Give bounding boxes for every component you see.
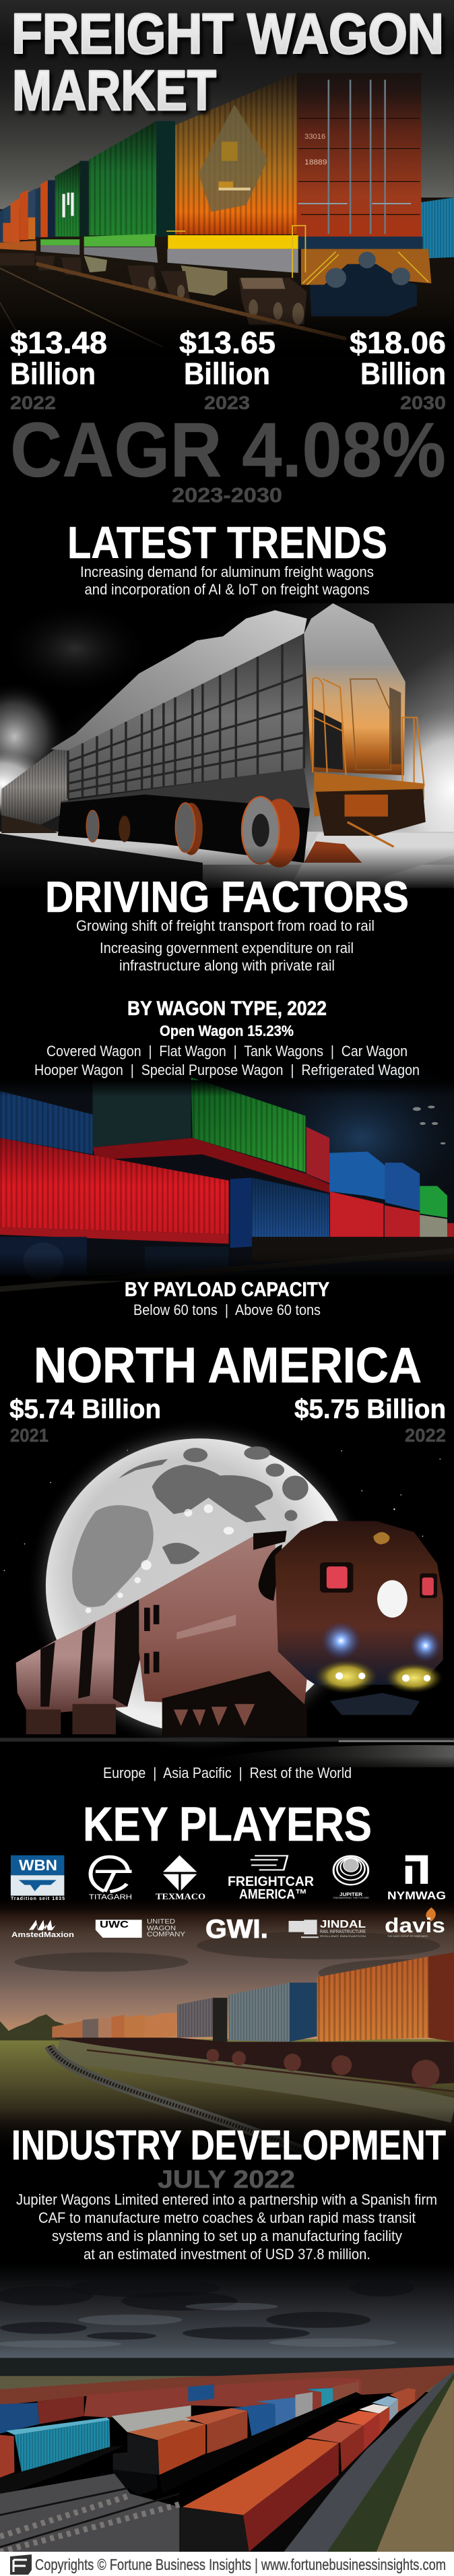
logo: Jupiter: ENGINEERING THE FUTURE (333, 1897, 370, 1899)
icon: storm clouds (0, 2278, 414, 2339)
icon: bogies (0, 1237, 454, 1292)
icon: green containers (55, 121, 175, 237)
text: trends description: Increasing demand for aluminum freight wagons (80, 563, 374, 580)
stat: north america 2021 (9, 1394, 161, 1446)
logo: FreightCar America (228, 1856, 315, 1902)
stat: north america 2022: $5.75 Billion (294, 1394, 446, 1424)
logo: Texmaco: TEXMACO (156, 1891, 205, 1901)
icon: red container end: 33016 (304, 133, 325, 141)
illustration: locomotive and moon (0, 1418, 454, 1773)
logo: Jindal Rail: RAIL INFRASTRUCTURE (320, 1930, 366, 1934)
logo: FreightCar America: FREIGHTCAR (228, 1874, 315, 1889)
logo: FreightCar America: AMERICA™ (239, 1887, 307, 1902)
text: other regions: Europe | Asia Pacific | Rest of the World (103, 1765, 352, 1781)
icon: blue container (230, 1177, 329, 1248)
panel: industry development (0, 2122, 454, 2552)
stat: 2023: 2023 (204, 392, 250, 413)
text: development description: systems and is planning to set up a manufacturing facility (52, 2228, 402, 2244)
logo: Nymwag: NYMWAG (387, 1889, 446, 1902)
panel: latest trends (0, 518, 454, 891)
icon: foreground train (180, 2366, 454, 2552)
icon: bogies and wheels (0, 253, 307, 325)
text: driver two: Increasing government expenditure on rail (100, 940, 354, 956)
icon: tank cars (16, 1599, 142, 1715)
logo: United Wagon Company: UWC (100, 1919, 129, 1930)
icon: ground and tracks (0, 2366, 454, 2552)
logo: AmstedMaxion (11, 1920, 74, 1939)
logo: WBN (11, 1856, 65, 1901)
footer (0, 2552, 454, 2576)
text: development description: at an estimated investment of USD 37.8 million. (84, 2246, 370, 2263)
title: MARKET (12, 59, 216, 122)
icon: locomotive side (139, 1531, 307, 1709)
icon: red container end: 18889 (304, 158, 327, 166)
heading: key players: KEY PLAYERS (83, 1798, 372, 1851)
logo: Nymwag (387, 1856, 446, 1902)
heading: date: JULY 2022 (158, 2166, 295, 2193)
icon: trees (0, 2015, 64, 2040)
text: driver one: Growing shift of freight transport from road to rail (76, 917, 375, 934)
stat: 2030: $18.06 (350, 326, 446, 360)
icon: storm clouds (14, 1932, 454, 1987)
text: driver two: infrastructure along with private rail (119, 957, 335, 974)
logo: Titagarh: TITAGARH (89, 1893, 132, 1901)
icon: rails (0, 264, 344, 346)
text: wagon types: Hooper Wagon | Special Purpose Wagon | Refrigerated Wagon (34, 1062, 420, 1078)
icon: flatcar beam (93, 1138, 330, 1193)
icon: train containers (52, 1953, 454, 2042)
icon: long red container (0, 1138, 229, 1244)
logo: Davis (385, 1907, 445, 1938)
icon: right blue container (421, 197, 454, 259)
icon: green container (191, 1077, 329, 1184)
text: open wagon share: Open Wagon 15.23% (160, 1022, 294, 1039)
logo: United Wagon Company: WAGON (147, 1925, 176, 1932)
panel: key players (11, 1798, 446, 1944)
icon: moon (26, 1418, 373, 1754)
logo: Jupiter (333, 1856, 370, 1899)
heading: latest trends: LATEST TRENDS (67, 518, 387, 568)
title (11, 2, 444, 122)
logo: WBN: WBN (19, 1857, 57, 1874)
logo: Davis: THE DAVIS GROUP OF COMPANIES (387, 1935, 428, 1938)
logo: Jindal Rail: JINDAL (320, 1919, 366, 1930)
stat: north america 2022: 2022 (405, 1425, 446, 1446)
icon: wagon end wall (304, 603, 426, 847)
logo: United Wagon Company (96, 1918, 185, 1938)
panel: driving factors (0, 872, 454, 1318)
text: driver two (100, 940, 354, 974)
panel: hero with freight train (0, 0, 454, 507)
text: development description (16, 2191, 437, 2263)
logo: Jindal Rail: ROLLING INNOVATION (320, 1935, 366, 1938)
stat: 2023: Billion (184, 357, 270, 391)
icon: Fortune Business Insights logo (10, 2554, 32, 2575)
icon: bogies (52, 2037, 454, 2091)
stat: north america 2021: 2021 (10, 1425, 48, 1446)
logo: AmstedMaxion: AmstedMaxion (11, 1931, 74, 1939)
stat: 2030 (350, 326, 446, 413)
icon: red container end (297, 73, 421, 237)
logo: GWI: GWI. (205, 1915, 268, 1944)
icon: gravel bank and track (49, 2046, 454, 2157)
logo: Jindal Rail (289, 1919, 366, 1938)
logo: United Wagon Company: UNITED (147, 1918, 175, 1926)
logo: United Wagon Company: COMPANY (147, 1931, 185, 1938)
icon: rear wagon (1, 749, 68, 833)
icon: orange container side (175, 73, 297, 235)
icon: gravel (174, 1745, 454, 1767)
icon: back container rows (0, 2365, 454, 2434)
icon: treeline and field (0, 2358, 454, 2392)
icon: locomotive front (275, 1521, 443, 1715)
stat: north america 2021: $5.74 Billion (9, 1394, 161, 1424)
illustration: sunset container train (0, 1896, 454, 2157)
stat: 2023: $13.65 (179, 326, 275, 360)
logo: Texmaco (156, 1856, 205, 1901)
CAGR period: 2023-2030 (172, 483, 282, 507)
icon: rear containers (0, 180, 55, 243)
illustration: covered grey wagon (0, 602, 454, 891)
stat: 2030: 2030 (400, 392, 446, 413)
heading: by wagon type: BY WAGON TYPE, 2022 (127, 998, 327, 1020)
icon: running gear (0, 1671, 454, 1741)
text: development description: CAF to manufacture metro coaches & urban rapid mass transit (38, 2209, 416, 2226)
heading: by payload capacity: BY PAYLOAD CAPACITY (125, 1279, 329, 1301)
illustration: rail yard (0, 2264, 454, 2552)
icon: tarp load (51, 610, 307, 751)
stat: 2022: $13.48 (10, 326, 107, 360)
icon: wagon platforms (0, 226, 431, 316)
text: wagon types (34, 1043, 420, 1078)
stat: 2022: 2022 (10, 392, 56, 413)
text: trends description (80, 563, 374, 598)
stat: north america 2022 (294, 1394, 446, 1446)
stat: 2022: Billion (10, 357, 96, 391)
logo: WBN: Tradition seit 1835 (11, 1897, 65, 1901)
heading: driving factors: DRIVING FACTORS (45, 872, 409, 921)
icon: teal container (0, 2418, 125, 2496)
illustration: container train at night (0, 1050, 454, 1292)
text: wagon types: Covered Wagon | Flat Wagon | Tank Wagons | Car Wagon (46, 1043, 408, 1060)
heading: north america: NORTH AMERICA (34, 1337, 422, 1393)
icon: undercarriage and wheels (58, 795, 362, 867)
icon: stars (4, 1450, 441, 1571)
stat: 2030: Billion (360, 357, 446, 391)
text: trends description: and incorporation of AI & IoT on freight wagons (85, 581, 369, 598)
text: payload capacities: Below 60 tons | Above 60 tons (133, 1301, 321, 1318)
panel: north america (0, 1337, 454, 1781)
logo: Davis: davis (385, 1913, 445, 1937)
stat: 2022 (10, 326, 107, 413)
stat: 2023 (179, 326, 275, 413)
icon: middle train (111, 2381, 362, 2495)
logo: Titagarh (89, 1857, 132, 1901)
icon: blue and dark upper containers (0, 1080, 191, 1155)
icon: distant containers (329, 1152, 454, 1246)
logo: Jupiter: JUPITER (339, 1893, 362, 1897)
icon: wagon side grid (61, 634, 310, 808)
